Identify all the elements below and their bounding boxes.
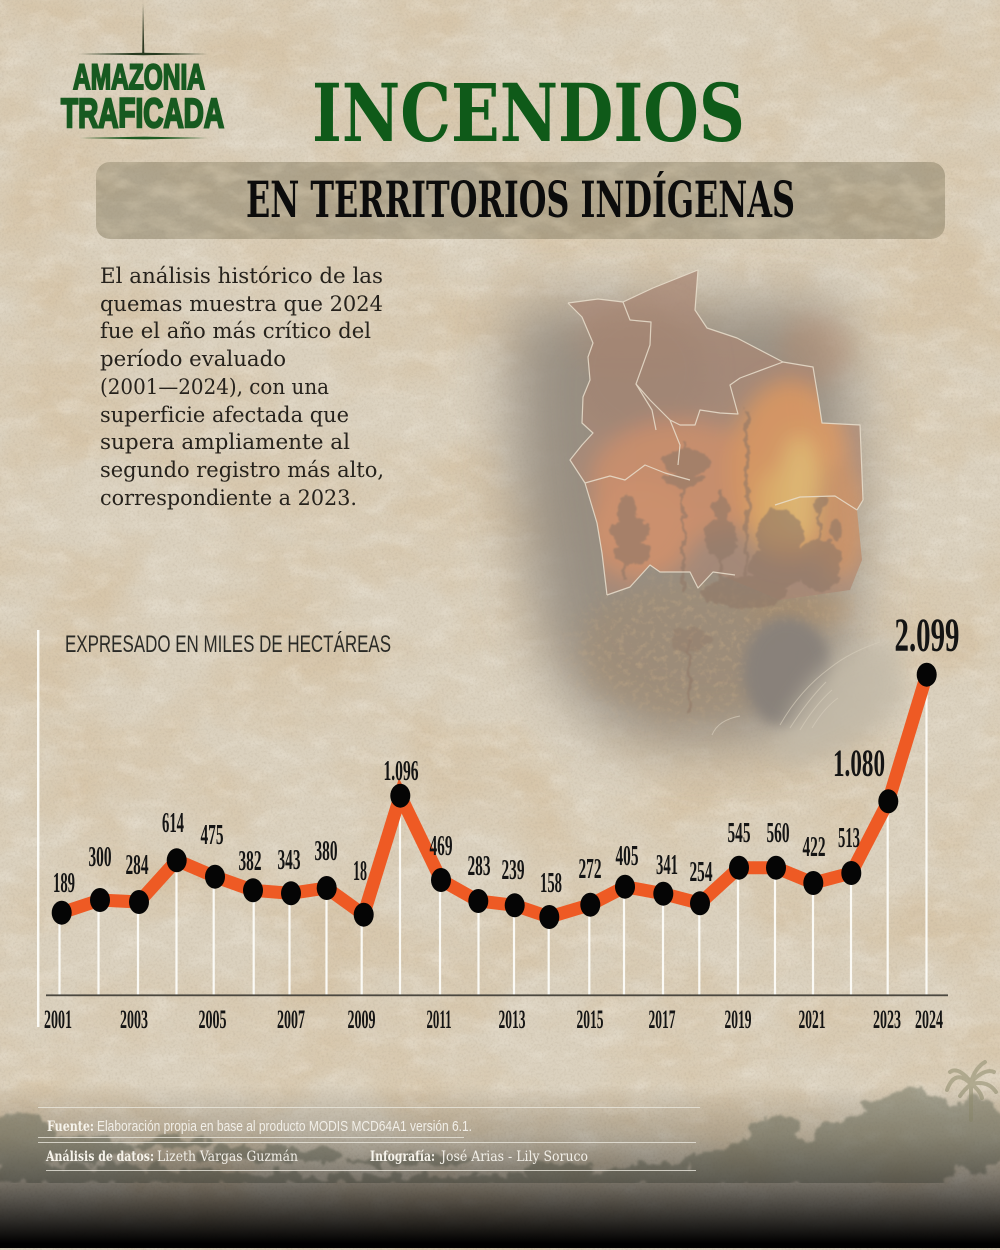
intro text [100, 264, 384, 511]
value labels: 343 [278, 845, 300, 876]
footer treeline [0, 1062, 1000, 1190]
year labels: 2003 [120, 1005, 148, 1034]
value labels: 475 [200, 820, 224, 851]
design credit: José Arias - Lily Soruco [439, 1149, 588, 1165]
data analysis credit [45, 1149, 298, 1165]
year labels: 2023 [873, 1005, 901, 1034]
intro text: El análisis histórico de las [100, 264, 383, 289]
logo: Amazonia Traficada: TRAFICADA [61, 90, 224, 136]
value labels: 300 [88, 842, 112, 873]
design credit: Infografía: [370, 1149, 435, 1165]
photo: fire and Bolivia map [510, 265, 905, 765]
map of Bolivia [560, 265, 870, 605]
year labels: 2013 [498, 1005, 526, 1034]
value labels: 1.096 [384, 756, 418, 787]
value labels: 380 [314, 836, 338, 867]
footer dark gradient [0, 1085, 1000, 1248]
value labels: 545 [728, 818, 750, 849]
year labels: 2001 [44, 1005, 72, 1034]
year labels: 2015 [576, 1005, 604, 1034]
data analysis credit: Lizeth Vargas Guzmán [157, 1149, 298, 1165]
ember speckle [570, 580, 860, 720]
year labels: 2017 [648, 1005, 676, 1034]
year labels: 2024 [915, 1005, 943, 1034]
chart unit caption: EXPRESADO EN MILES DE HECTÁREAS [65, 631, 391, 658]
value labels: 254 [690, 857, 712, 888]
year labels: 2005 [198, 1005, 226, 1034]
value labels: 2.099 [894, 609, 960, 662]
value labels: 469 [430, 831, 452, 862]
value labels [53, 609, 960, 899]
logo: Amazonia Traficada [61, 3, 224, 139]
data points [52, 663, 937, 929]
credits [38, 1108, 700, 1170]
value labels: 239 [502, 855, 524, 886]
intro text: supera ampliamente al [100, 430, 350, 455]
year labels: 2011 [426, 1005, 452, 1034]
year labels [44, 1005, 943, 1034]
value labels: 405 [616, 841, 638, 872]
value labels: 1.080 [833, 742, 885, 785]
value labels: 283 [468, 851, 490, 882]
intro text: quemas muestra que 2024 [100, 292, 383, 317]
logo: Amazonia Traficada: AMAZONIA [73, 58, 205, 97]
title: INCENDIOS [312, 66, 745, 160]
map borders [568, 270, 863, 595]
value labels: 513 [838, 823, 860, 854]
value labels: 284 [126, 850, 148, 881]
value labels: 18 [353, 856, 367, 887]
person silhouette [712, 617, 905, 765]
intro text: segundo registro más alto, [100, 458, 384, 483]
year labels: 2007 [277, 1005, 305, 1034]
value labels: 560 [766, 818, 790, 849]
value labels: 189 [53, 868, 75, 899]
forest silhouettes [609, 410, 842, 715]
value labels: 341 [656, 850, 678, 881]
palm tree [947, 1062, 996, 1120]
year labels: 2019 [724, 1005, 752, 1034]
value labels: 158 [540, 868, 562, 899]
year labels: 2009 [348, 1005, 376, 1034]
value labels: 272 [578, 854, 602, 885]
source line: Fuente: [47, 1119, 94, 1135]
source line: Elaboración propia en base al producto MODIS MCD64A1 versión 6.1. [97, 1118, 472, 1135]
subtitle band [96, 162, 945, 239]
intro text: correspondiente a 2023. [100, 486, 357, 511]
intro text: superficie afectada que [100, 403, 349, 428]
intro text: fue el año más crítico del [100, 319, 371, 344]
trend line [62, 675, 927, 917]
design credit [370, 1149, 588, 1165]
value labels: 422 [802, 832, 826, 863]
value labels: 614 [162, 808, 184, 839]
smoke haze [510, 305, 858, 745]
year labels: 2021 [798, 1005, 826, 1034]
data analysis credit: Análisis de datos: [45, 1149, 154, 1165]
value labels: 382 [238, 846, 262, 877]
intro text: (2001—2024), con una [100, 375, 329, 400]
intro text: período evaluado [100, 347, 286, 372]
chart: burned area 2001-2024 [37, 609, 960, 1034]
warm glow [570, 305, 855, 720]
